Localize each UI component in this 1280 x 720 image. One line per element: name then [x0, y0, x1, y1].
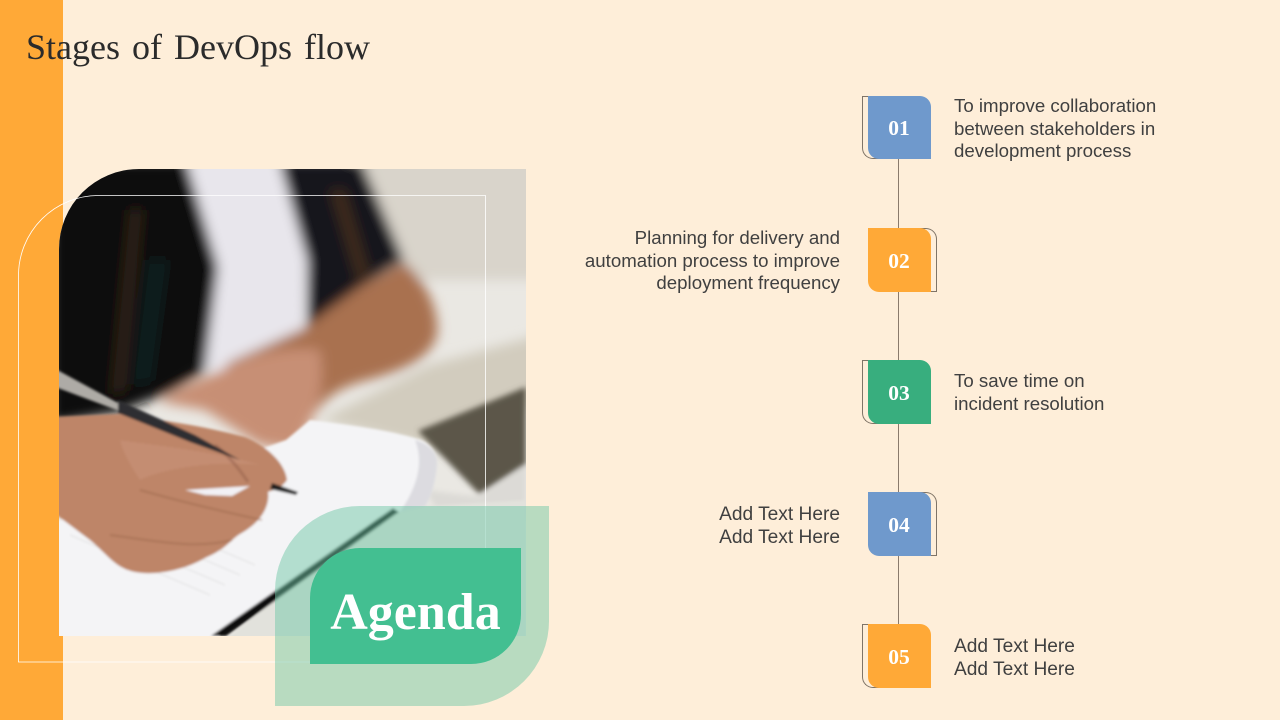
- agenda label: Agenda: [330, 584, 501, 641]
- badge 04: 04: [888, 513, 910, 537]
- bracket 02: [918, 228, 937, 292]
- bracket 03: [862, 360, 879, 424]
- badge 02: 02: [888, 249, 910, 273]
- timeline connector: [898, 159, 899, 625]
- stage 02: [868, 228, 937, 292]
- stage 01 text: between stakeholders in: [954, 118, 1155, 139]
- stage 05 text: Add Text Here: [954, 636, 1075, 657]
- stage 01 text: development process: [954, 140, 1131, 161]
- stage 04 text: Add Text Here: [719, 527, 840, 548]
- stage 04: [868, 492, 937, 556]
- stage 04 text: Add Text Here: [719, 504, 840, 525]
- badge 04: [868, 492, 931, 556]
- translucent green leaf shape: [275, 506, 549, 706]
- stage 03: [862, 360, 931, 424]
- title: Stages of DevOps flow: [26, 27, 370, 67]
- badge 03: [868, 360, 931, 424]
- stage 01: [862, 96, 931, 159]
- stage 02 text: automation process to improve: [585, 250, 840, 271]
- stage 02 text: [585, 227, 840, 293]
- bracket 05: [862, 624, 879, 688]
- stage 01 text: [954, 95, 1156, 161]
- badge 01: 01: [888, 116, 910, 140]
- stage 03 text: incident resolution: [954, 393, 1104, 414]
- agenda label: [310, 548, 521, 664]
- stage 03 text: To save time on: [954, 370, 1085, 391]
- stage 02 text: deployment frequency: [656, 272, 840, 293]
- white outline frame: [18, 195, 486, 662]
- stage 02 text: Planning for delivery and: [635, 227, 840, 248]
- badge 03: 03: [888, 381, 910, 405]
- bracket 01: [862, 96, 879, 159]
- badge 05: 05: [888, 645, 910, 669]
- photo: hand writing in notebook: [59, 169, 526, 636]
- stage 05 text: [954, 636, 1075, 680]
- badge 01: [868, 96, 931, 159]
- stage 01 text: To improve collaboration: [954, 95, 1156, 116]
- stage 04 text: [719, 504, 840, 548]
- bracket 04: [918, 492, 937, 556]
- stage 05: [862, 624, 931, 688]
- orange side bar: [0, 0, 63, 720]
- stage 03 text: [954, 370, 1104, 414]
- badge 05: [868, 624, 931, 688]
- badge 02: [868, 228, 931, 292]
- stage 05 text: Add Text Here: [954, 659, 1075, 680]
